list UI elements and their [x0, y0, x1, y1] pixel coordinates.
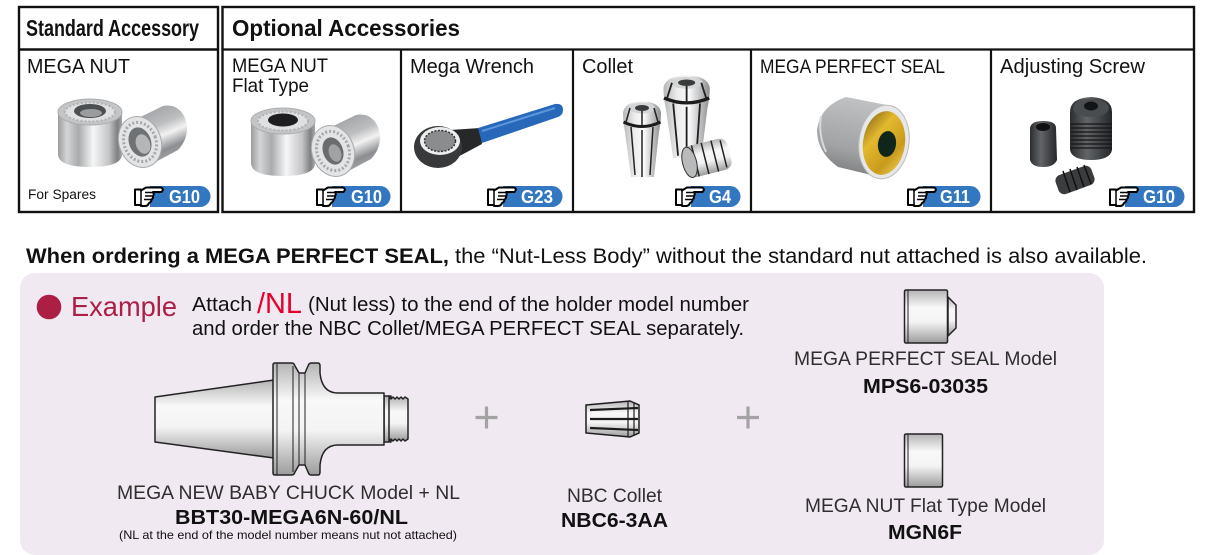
image: flat nut pair — [251, 108, 380, 183]
text: perfect seal model: MPS6-03035 — [863, 375, 988, 398]
image: collets — [623, 75, 733, 180]
badge: G10: G10 — [351, 187, 382, 207]
badge: G10: G10 — [169, 187, 200, 207]
text: flat nut model: MEGA NUT Flat Type Model — [805, 495, 1046, 517]
badge: G23: G23 — [521, 187, 553, 207]
badge: G4: G4 — [709, 187, 731, 207]
text: flat nut model: MGN6F — [888, 521, 962, 544]
image: perfect seal — [817, 97, 914, 182]
cell: collet — [582, 55, 740, 207]
image: adjusting screws — [1030, 97, 1112, 196]
badge: G11: G11 — [940, 187, 970, 207]
text: perfect seal model: MEGA PERFECT SEAL Model — [794, 348, 1057, 370]
badge: G10: G10 — [1143, 187, 1175, 207]
note: for spares: For Spares — [28, 187, 96, 202]
badge: G23 — [488, 186, 562, 207]
cell: adjusting screw: Adjusting Screw — [1000, 55, 1145, 78]
cell: mega nut flat type: Flat Type — [232, 75, 309, 97]
icon: plus — [737, 406, 759, 428]
cell: mega perfect seal — [760, 56, 980, 207]
badge: G4 — [676, 186, 740, 207]
badge: G11 — [908, 186, 980, 207]
diagram: flat nut — [904, 434, 942, 487]
panel: standard accessory — [19, 7, 218, 212]
diagram: holder — [155, 363, 408, 475]
cell: mega perfect seal: MEGA PERFECT SEAL — [760, 56, 945, 78]
instructions: (Nut less) to the end of the holder model number — [308, 294, 749, 316]
heading: optional accessories: Optional Accessories — [232, 15, 460, 41]
text: nbc collet model — [561, 486, 668, 532]
text: nbc collet model: NBC6-3AA — [561, 509, 668, 532]
cell: mega wrench — [410, 55, 563, 207]
image: wrench — [414, 104, 563, 168]
icon: plus — [476, 406, 498, 428]
instructions: and order the NBC Collet/MEGA PERFECT SEAL separately. — [192, 318, 744, 340]
panel: optional accessories — [222, 7, 1194, 212]
text: holder model — [117, 482, 460, 542]
cell: adjusting screw — [1000, 55, 1184, 207]
badge: G10 — [135, 186, 210, 207]
instructions: Attach — [192, 294, 252, 316]
image: mega nut pair — [58, 99, 187, 174]
icon: example bullet — [37, 295, 61, 319]
text: perfect seal model — [794, 348, 1057, 398]
badge: G10 — [317, 186, 390, 207]
label: mega nut: MEGA NUT — [27, 55, 130, 78]
heading: example: Example — [71, 291, 177, 322]
text: nbc collet model: NBC Collet — [567, 486, 663, 507]
cell: mega nut flat type — [232, 55, 390, 207]
instructions: /NL — [257, 288, 302, 320]
text: holder model: (NL at the end of the model number means nut not attached) — [119, 528, 457, 542]
text: holder model: BBT30-MEGA6N-60/NL — [175, 506, 408, 529]
note: ordering statement: When ordering a MEGA PERFECT SEAL, the “Nut-Less Body” without the standard nut attached is also available. — [26, 245, 1147, 268]
text: holder model: MEGA NEW BABY CHUCK Model + NL — [117, 482, 460, 504]
instructions — [192, 288, 749, 340]
diagram: nbc collet — [586, 401, 639, 437]
heading: standard accessory: Standard Accessory — [26, 15, 199, 41]
panel: example — [20, 273, 1104, 555]
text: flat nut model — [805, 495, 1046, 544]
cell: mega wrench: Mega Wrench — [410, 55, 534, 78]
cell: collet: Collet — [582, 55, 633, 78]
cell: mega nut flat type: MEGA NUT — [232, 55, 328, 77]
badge: G10 — [1110, 186, 1184, 207]
diagram: perfect seal — [904, 290, 956, 343]
